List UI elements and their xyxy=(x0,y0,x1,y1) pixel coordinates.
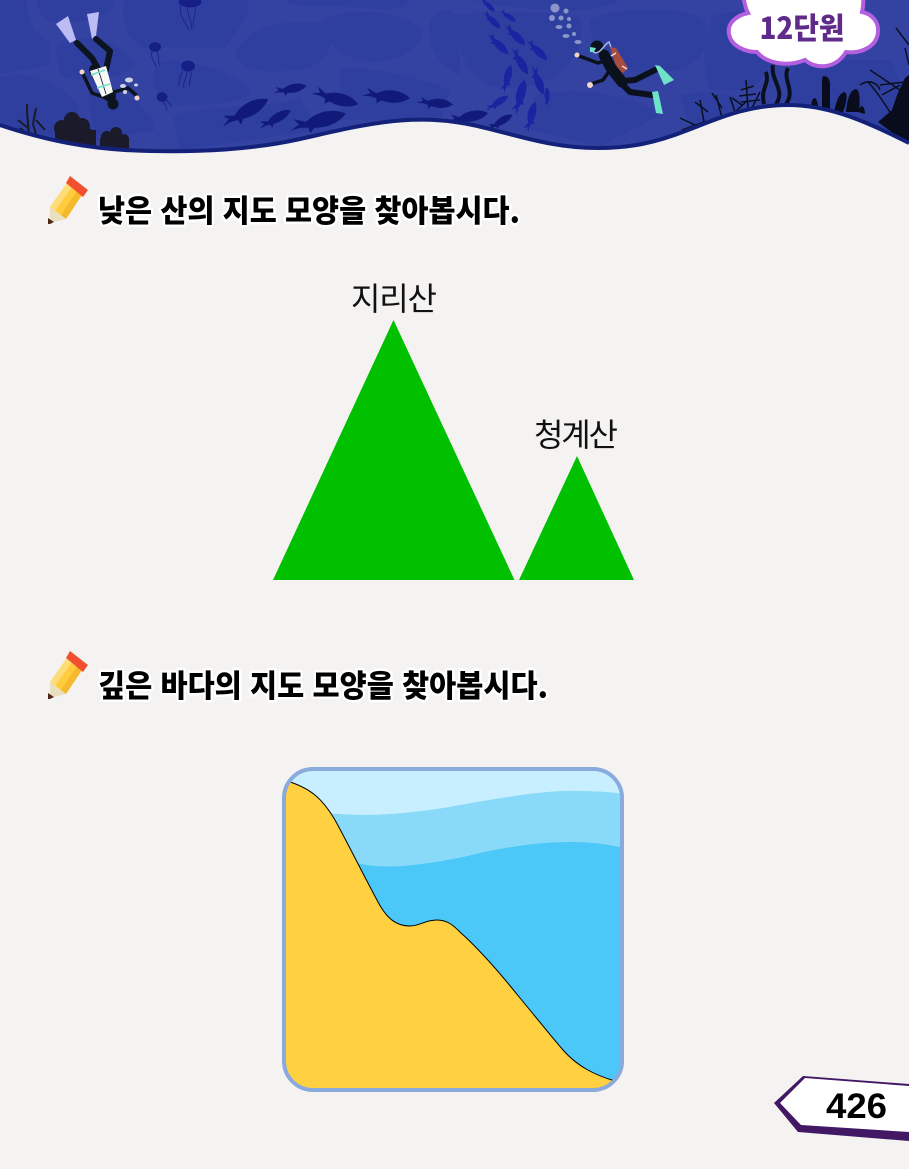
coral and seaweed, left xyxy=(54,112,129,152)
fish school xyxy=(223,84,512,133)
page number tag xyxy=(774,1076,909,1141)
page number: 426 xyxy=(826,1087,887,1126)
heading: second question: 깊은 바다의 지도 모양을 찾아봅시다. xyxy=(98,661,548,706)
icon: pencil, second question xyxy=(48,651,88,699)
diver on the left xyxy=(56,12,140,110)
icon: pencil, first question xyxy=(48,176,88,224)
heading: first question: 낮은 산의 지도 모양을 찾아봅시다. xyxy=(98,186,520,231)
label: Cheonggyesan: 청계산 xyxy=(534,410,618,456)
mountain: Jirisan xyxy=(273,320,514,580)
mountain chart xyxy=(273,274,634,580)
header banner: underwater scene xyxy=(0,0,909,160)
jellyfish group xyxy=(150,0,201,111)
label: Jirisan: 지리산 xyxy=(351,274,437,320)
mountain: Cheonggyesan xyxy=(519,456,634,580)
seaweed and rocks, right xyxy=(680,28,909,130)
unit badge: cloud xyxy=(729,0,878,66)
diver on the right with bubbles xyxy=(549,4,674,114)
badge label: 12단원 xyxy=(760,4,844,48)
land slope xyxy=(284,781,624,1090)
ocean floor map panel xyxy=(280,769,624,1092)
